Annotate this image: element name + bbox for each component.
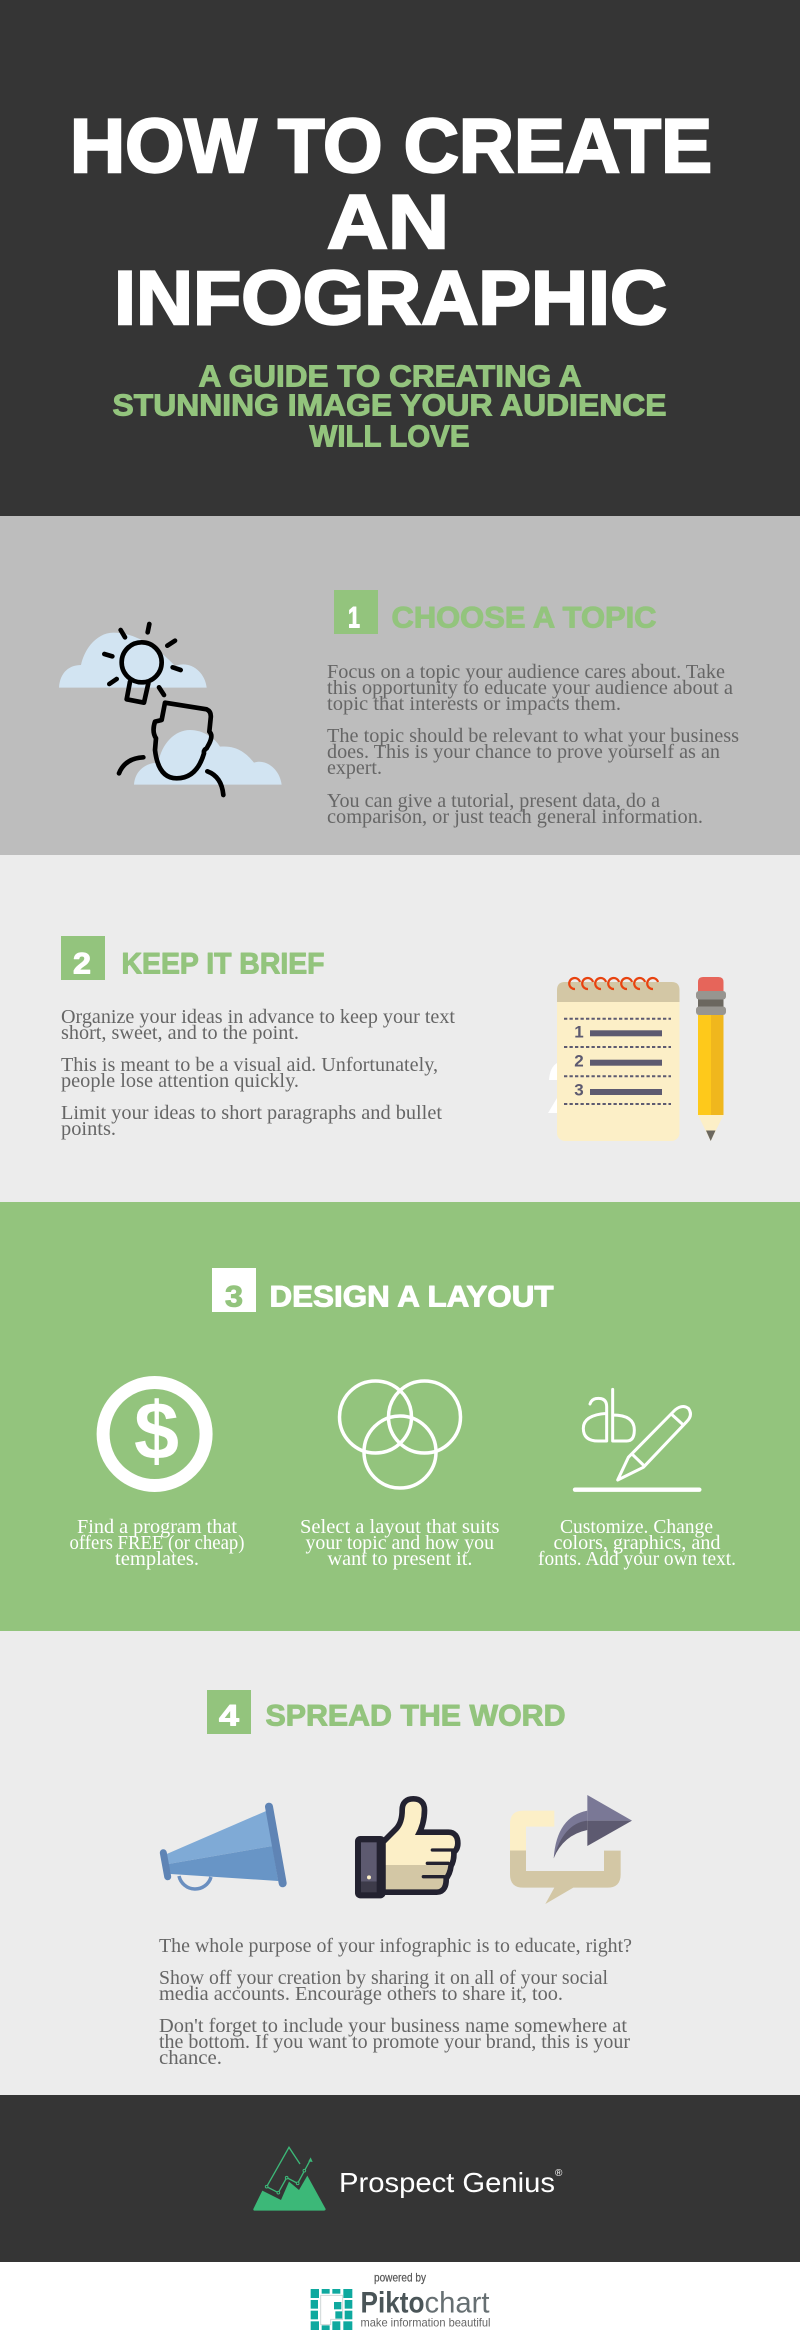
- number badge 2: 2: [73, 948, 91, 980]
- icon: notepad and pencil: [548, 977, 726, 1141]
- number badge 1: 1: [348, 602, 360, 634]
- heading: spread the word: SPREAD THE WORD: [266, 1700, 566, 1732]
- text: caption customize: colors, graphics, and: [554, 1532, 720, 1554]
- icon: dollar coin: $: [134, 1386, 179, 1477]
- brand name: Prospect Genius: [339, 2167, 555, 2198]
- text: caption free templates: Find a program that: [77, 1516, 237, 1538]
- icon: share arrow speech bubble: [510, 1795, 632, 1904]
- title: AN: [327, 180, 449, 265]
- text block: step 1 body: expert.: [327, 757, 382, 779]
- icon: megaphone: [163, 1807, 283, 1889]
- wordmark: piktochart: [360, 2286, 490, 2320]
- tagline: make information beautiful: [360, 2316, 490, 2330]
- text block: step 4 body: [159, 1935, 632, 2069]
- title: HOW TO CREATE: [70, 104, 712, 189]
- text block: step 4 body: media accounts. Encourage others to share it, too.: [159, 1983, 563, 2005]
- icon: thumbs up: [355, 1802, 455, 1898]
- text: caption free templates: offers FREE (or cheap): [70, 1532, 244, 1554]
- number badge 3: [212, 1268, 256, 1314]
- icon: notepad and pencil: 3: [574, 1080, 584, 1100]
- text block: step 4 body: the bottom. If you want to promote your brand, this is your: [159, 2031, 630, 2053]
- brand name: ®: [555, 2168, 563, 2179]
- icon: piktochart logo mark: [311, 2289, 352, 2330]
- number badge 4: [207, 1690, 251, 1734]
- text block: step 1 body: does. This is your chance to prove yourself as an: [327, 741, 720, 763]
- icon: notepad and pencil: 1: [574, 1022, 584, 1042]
- text block: step 1 body: [327, 661, 739, 828]
- panel: powered by piktochart: [0, 2262, 800, 2342]
- icon: notepad and pencil: 2: [574, 1052, 584, 1070]
- text block: step 4 body: Don't forget to include your business name somewhere at: [159, 2015, 627, 2037]
- text block: step 2 body: short, sweet, and to the point.: [61, 1022, 299, 1044]
- text block: step 4 body: The whole purpose of your infographic is to educate, right?: [159, 1935, 632, 1957]
- icon: ab text and pencil: [575, 1389, 699, 1490]
- text block: step 2 body: This is meant to be a visual aid. Unfortunately,: [61, 1054, 438, 1076]
- text: caption free templates: templates.: [115, 1548, 199, 1570]
- panel: header: [0, 0, 800, 516]
- text: caption free templates: [70, 1516, 244, 1570]
- text: caption select layout: your topic and how you: [306, 1532, 494, 1554]
- text: caption customize: [538, 1516, 736, 1570]
- text block: step 2 body: points.: [61, 1118, 116, 1140]
- text: caption select layout: Select a layout that suits: [300, 1516, 500, 1538]
- text block: step 1 body: this opportunity to educate your audience about a: [327, 677, 733, 699]
- panel: step 3 design a layout: [0, 1202, 800, 1631]
- text block: step 4 body: chance.: [159, 2047, 222, 2069]
- text block: step 4 body: Show off your creation by sharing it on all of your social: [159, 1967, 608, 1989]
- text block: step 1 body: Focus on a topic your audience cares about. Take: [327, 661, 725, 683]
- icon: lightbulb and person with clouds: [59, 624, 282, 795]
- heading: choose a topic: CHOOSE A TOPIC: [392, 602, 656, 634]
- panel: step 1 choose a topic: [0, 516, 800, 855]
- heading: design a layout: DESIGN A LAYOUT: [270, 1280, 554, 1314]
- panel: step 2 keep it brief: [0, 855, 800, 1202]
- title: [70, 104, 712, 341]
- subtitle: A GUIDE TO CREATING A: [198, 360, 582, 394]
- text block: step 2 body: people lose attention quickly.: [61, 1070, 299, 1092]
- subtitle: WILL LOVE: [310, 420, 470, 454]
- text: caption select layout: want to present it.: [328, 1548, 472, 1570]
- panel: step 4 spread the word: [0, 1631, 800, 2095]
- number badge 2: [61, 936, 105, 980]
- icon: dollar coin: [103, 1382, 206, 1486]
- wordmark: piktochart: Pikto: [360, 2286, 424, 2320]
- title: INFOGRAPHIC: [114, 256, 667, 341]
- subtitle: [112, 360, 666, 454]
- text: caption customize: Customize. Change: [560, 1516, 713, 1538]
- panel: footer brand: [0, 2095, 800, 2262]
- icon: prospect genius logo: [253, 2147, 326, 2211]
- text block: step 1 body: You can give a tutorial, present data, do a: [327, 790, 660, 812]
- text block: step 1 body: The topic should be relevant to what your business: [327, 725, 739, 747]
- text: powered by: powered by: [374, 2270, 426, 2284]
- number badge 4: 4: [219, 1700, 240, 1732]
- subtitle: STUNNING IMAGE YOUR AUDIENCE: [112, 388, 666, 422]
- text block: step 2 body: Organize your ideas in advance to keep your text: [61, 1006, 455, 1028]
- heading: keep it brief: KEEP IT BRIEF: [122, 948, 324, 980]
- text block: step 2 body: [61, 1006, 455, 1140]
- number badge 3: 3: [225, 1280, 243, 1314]
- icon: overlapping circles: [340, 1381, 460, 1488]
- text block: step 1 body: topic that interests or impacts them.: [327, 693, 621, 715]
- text: caption customize: fonts. Add your own text.: [538, 1548, 736, 1570]
- text: caption select layout: [300, 1516, 500, 1570]
- text block: step 1 body: comparison, or just teach general information.: [327, 806, 703, 828]
- number badge 1: [334, 590, 378, 634]
- text block: step 2 body: Limit your ideas to short paragraphs and bullet: [61, 1102, 442, 1124]
- wordmark: piktochart: chart: [424, 2286, 490, 2320]
